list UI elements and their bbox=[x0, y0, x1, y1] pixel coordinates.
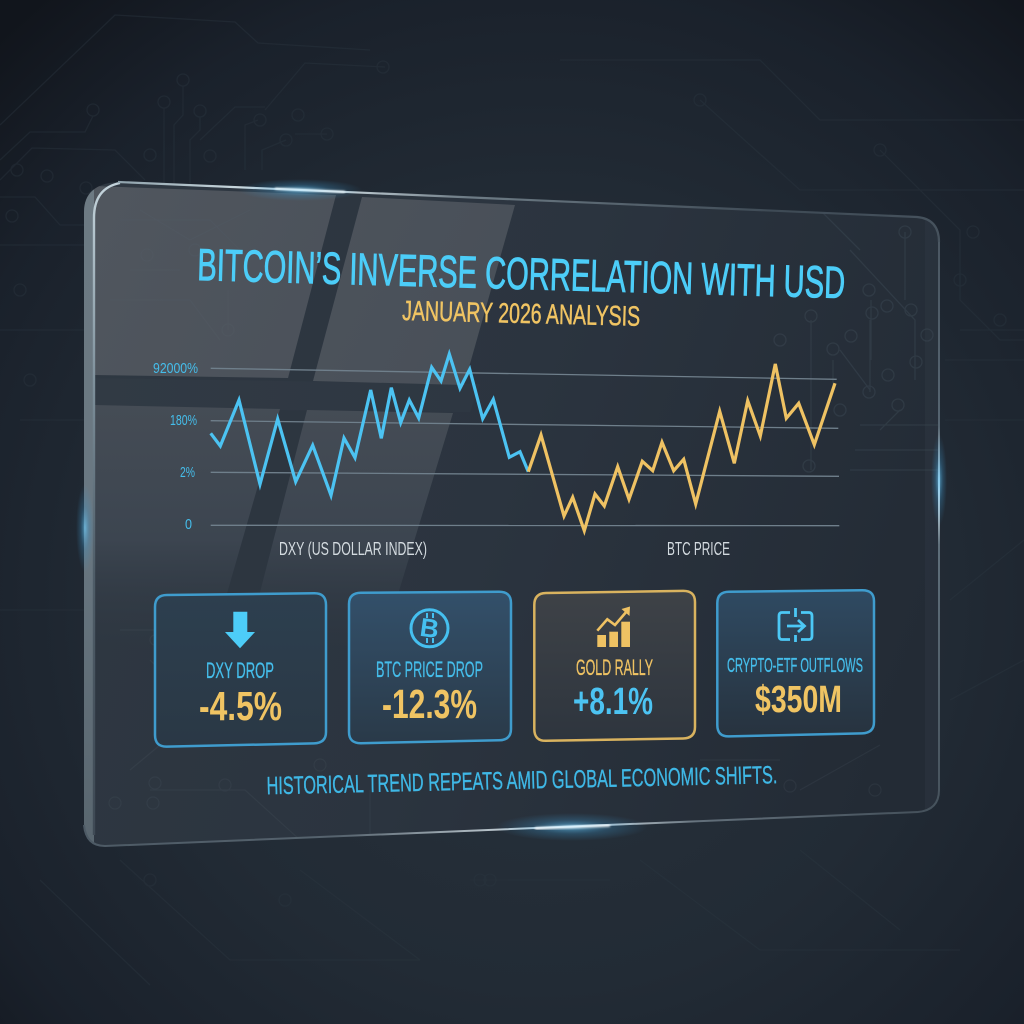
chart grid lines bbox=[211, 368, 839, 526]
card: DXY drop: -4.5% bbox=[199, 683, 282, 729]
card: crypto ETF outflows: $350M bbox=[755, 679, 842, 721]
card: DXY drop bbox=[155, 593, 326, 747]
panel: glass card bbox=[84, 180, 939, 850]
y axis labels bbox=[153, 360, 198, 533]
x axis labels: DXY (US DOLLAR INDEX) bbox=[279, 539, 427, 559]
icon: transfer arrow bbox=[779, 608, 812, 642]
card: BTC price drop bbox=[349, 592, 511, 743]
card: crypto ETF outflows: CRYPTO-ETF OUTFLOWS bbox=[727, 655, 863, 677]
icon: bitcoin coin: B bbox=[418, 612, 441, 644]
card: gold rally bbox=[534, 591, 695, 741]
card: BTC price drop: BTC PRICE DROP bbox=[376, 657, 483, 682]
glass base bbox=[84, 182, 939, 846]
subtitle: JANUARY 2026 ANALYSIS bbox=[402, 295, 641, 332]
icon: bitcoin coin bbox=[411, 610, 448, 647]
glass left bevel bbox=[84, 180, 94, 850]
x axis labels: BTC PRICE bbox=[667, 539, 730, 559]
card: BTC price drop: -12.3% bbox=[382, 681, 477, 727]
card: gold rally: +8.1% bbox=[573, 681, 653, 723]
y axis labels: 2% bbox=[180, 464, 195, 481]
glass edges bbox=[118, 182, 939, 242]
BTC line bbox=[528, 364, 835, 531]
x axis labels bbox=[279, 539, 730, 559]
icon: rising bars bbox=[597, 606, 630, 647]
edge glows bbox=[76, 179, 947, 841]
y axis labels: 0 bbox=[185, 516, 192, 533]
icon: down arrow bbox=[225, 612, 255, 648]
y axis labels: 180% bbox=[170, 412, 197, 429]
y axis labels: 92000% bbox=[153, 360, 198, 377]
card: DXY drop: DXY DROP bbox=[206, 658, 274, 683]
card: crypto ETF outflows bbox=[717, 590, 874, 736]
line chart: DXY vs BTC bbox=[153, 354, 839, 559]
DXY line bbox=[211, 354, 528, 495]
card: gold rally: GOLD RALLY bbox=[576, 655, 653, 680]
